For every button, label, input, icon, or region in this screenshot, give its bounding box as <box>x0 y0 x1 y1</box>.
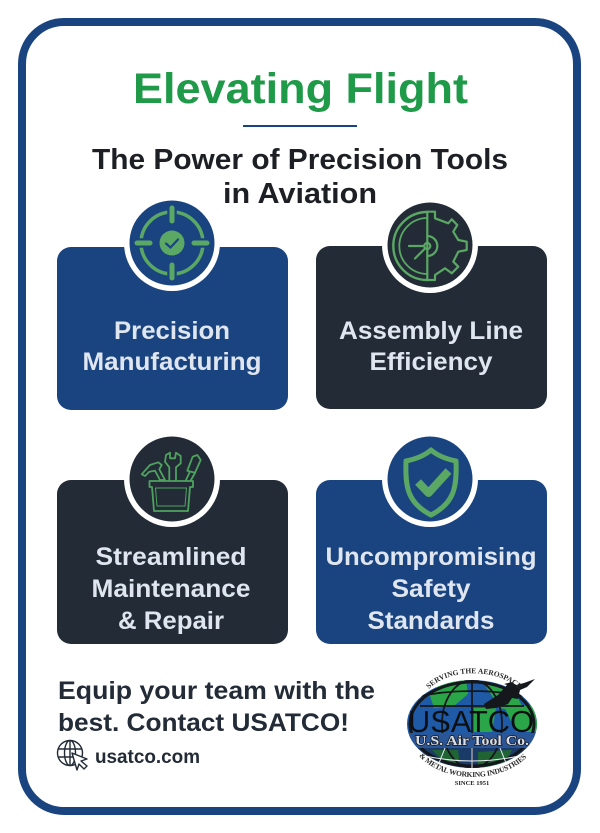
card label: Safety <box>392 575 471 603</box>
logo: USATCO: U.S. Air Tool Co. <box>415 734 529 749</box>
subtitle: The Power of Precision Tools <box>92 144 508 176</box>
subtitle <box>92 144 508 210</box>
icon: clock and gear <box>393 212 467 280</box>
card label <box>92 543 251 635</box>
icon: target with check <box>133 204 211 282</box>
icon: tool bucket <box>142 453 201 511</box>
logo: USATCO: & METAL WORKING INDUSTRIES <box>420 754 526 777</box>
call to action: Equip your team with the <box>58 677 375 705</box>
panel: precision manufacturing <box>57 195 288 410</box>
logo: USATCO: SERVING THE AEROSPACE <box>426 668 522 689</box>
card label: Maintenance <box>92 575 251 603</box>
panel: uncompromising safety standards <box>316 431 547 644</box>
card label: Standards <box>368 607 494 635</box>
wordmark: USATCO <box>408 705 534 739</box>
panel: streamlined maintenance and repair <box>57 431 288 644</box>
card label: Efficiency <box>370 348 493 376</box>
card label: Precision <box>114 317 230 345</box>
card label: Manufacturing <box>82 348 262 376</box>
card label: & Repair <box>118 607 224 635</box>
subtitle: in Aviation <box>223 178 377 210</box>
card label <box>82 317 262 376</box>
website link: usatco.com <box>95 747 200 768</box>
card label <box>326 543 536 635</box>
icon: shield with check <box>406 450 456 515</box>
card label: Streamlined <box>96 543 246 571</box>
logo: USATCO <box>407 668 537 787</box>
airplane <box>484 679 535 709</box>
title: Elevating Flight <box>133 66 468 113</box>
panel: assembly line efficiency <box>316 197 547 409</box>
globe <box>405 678 540 772</box>
icon: globe with cursor <box>58 740 87 770</box>
call to action <box>58 677 375 737</box>
title divider <box>243 125 357 127</box>
logo: USATCO: SINCE 1951 <box>455 780 489 787</box>
card label: Assembly Line <box>339 317 523 345</box>
card label <box>339 317 523 376</box>
card label: Uncompromising <box>326 543 536 571</box>
call to action: best. Contact USATCO! <box>58 709 349 737</box>
